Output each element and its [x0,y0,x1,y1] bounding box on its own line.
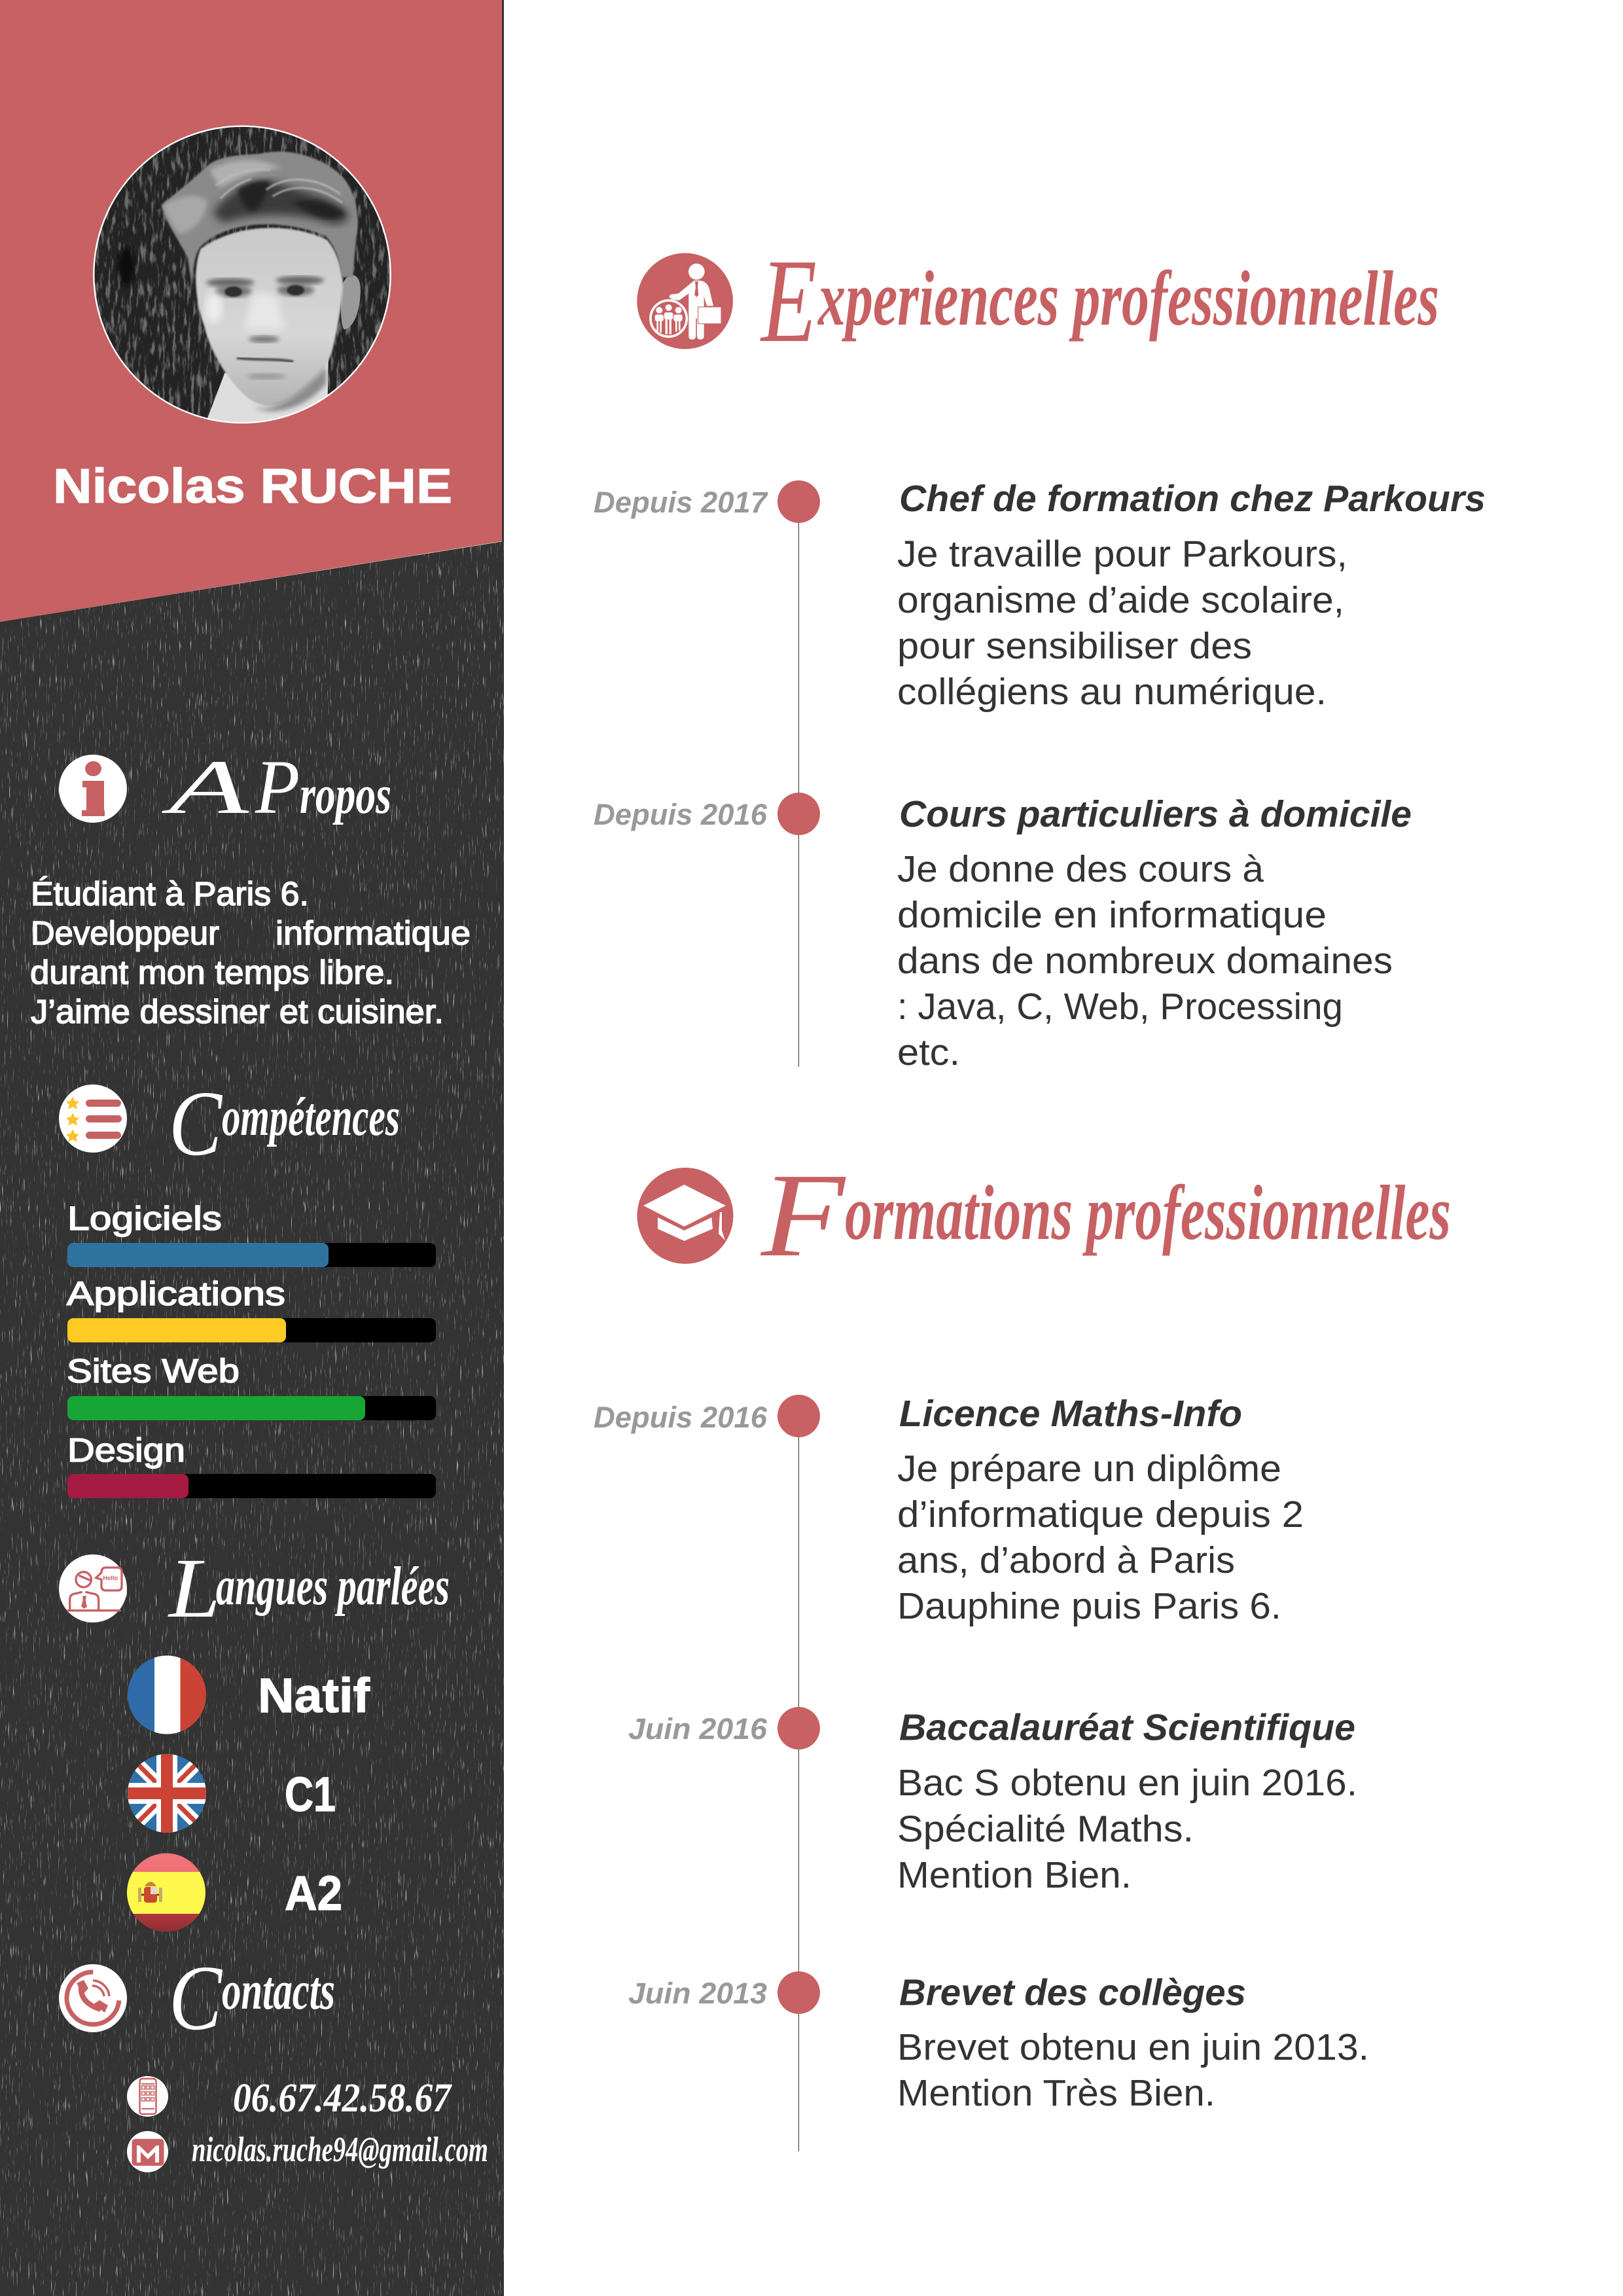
level: Natif: Natif [258,1668,370,1723]
entry: cours particuliers: : Java, C, Web, Processing [897,986,1343,1028]
skill: Logiciels: Logiciels [67,1200,222,1237]
icon: flag of France [128,1655,207,1734]
entry: Parkours: Je travaille pour Parkours, [897,533,1347,575]
level: A2: A2 [285,1866,342,1920]
icon: businessman [637,253,733,349]
icon: graduation cap [637,1168,733,1264]
text block: about [30,875,471,1030]
icon: mail [127,2131,168,2172]
entry: baccalaureat: Bac S obtenu en juin 2016. [897,1762,1357,1804]
timeline: formations [594,1393,1369,2151]
heading: Compétences: ompétences [222,1086,400,1147]
text block: about: Developpeur [31,914,219,952]
entry: licence [594,1393,1304,1627]
contact: email [127,2130,488,2172]
entry: cours particuliers: domicile en informatique [897,894,1327,936]
language: french [128,1655,370,1734]
text block: about: Étudiant à Paris 6. [31,875,309,912]
entry: Parkours: organisme d’aide scolaire, [897,579,1344,621]
icon: skills list [59,1085,127,1153]
section: competences heading [59,1071,400,1175]
entry: Parkours: Chef de formation chez Parkours [899,478,1486,520]
heading: Compétences: C [169,1071,223,1175]
entry: licence: Je prépare un diplôme [897,1448,1281,1490]
icon: flag of UK [128,1754,206,1833]
entry: cours particuliers [594,793,1412,1073]
skill: Design: Design [67,1431,185,1469]
timeline: experiences [594,478,1486,1073]
icon: info [59,755,127,823]
language: english [128,1754,336,1833]
skill: Applications [67,1275,436,1342]
skill: Sites Web: Sites Web [67,1352,240,1390]
name heading: Nicolas RUCHE [53,459,452,513]
heading: Formations professionnelles: F [760,1149,847,1282]
icon: mobile [127,2076,168,2117]
skill: Applications: Applications [67,1275,285,1312]
heading: A Propos: P [255,744,300,830]
heading: A Propos: ropos [300,764,391,825]
skill bars [67,1200,436,1498]
entry: Parkours: Depuis 2017 [594,486,768,519]
entry: brevet [628,1971,1369,2114]
heading: A Propos: A [161,744,250,830]
section heading: formations [637,1149,1451,1282]
heading: Langues parlées: angues parlées [216,1556,450,1617]
entry: Parkours [594,478,1486,713]
entry: brevet: Juin 2013 [628,1977,767,2010]
entry: Parkours: pour sensibiliser des [897,625,1252,667]
entry: cours particuliers: Depuis 2016 [594,798,768,831]
entry: brevet: Brevet des collèges [899,1971,1246,2013]
entry: licence: d’informatique depuis 2 [897,1494,1304,1535]
text block: about: J’aime dessiner et cuisiner. [31,993,444,1030]
heading: Contacts: ontacts [222,1960,335,2021]
skill: Sites Web [67,1352,436,1420]
entry: Parkours: collégiens au numérique. [897,671,1327,713]
entry: cours particuliers: etc. [897,1031,960,1073]
icon: hello speaker: Hello [103,1575,118,1581]
photo: portrait [92,124,393,427]
icon: flag of Spain [127,1853,205,1932]
text block: about: informatique [276,914,471,952]
entry: licence: Dauphine puis Paris 6. [897,1585,1281,1627]
entry: baccalaureat: Spécialité Maths. [897,1808,1194,1850]
text block: about: durant mon temps libre. [30,954,394,991]
heading: Contacts: C [169,1946,223,2049]
entry: baccalaureat [628,1707,1357,1896]
text: email address: nicolas.ruche94@gmail.com [192,2130,488,2169]
section: a propos heading [59,744,391,830]
level: C1: C1 [285,1767,336,1821]
entry: licence: Depuis 2016 [594,1401,768,1434]
icon: hello speaker [59,1554,127,1623]
entry: baccalaureat: Baccalauréat Scientifique [899,1707,1355,1749]
section: langues heading [59,1541,450,1636]
entry: cours particuliers: Cours particuliers à domicile [899,793,1412,835]
panel: dark sidebar background [0,537,504,2296]
entry: cours particuliers: dans de nombreux domaines [897,940,1393,982]
entry: baccalaureat: Mention Bien. [897,1854,1132,1896]
heading: Langues parlées: L [168,1541,221,1636]
icon: phone call [59,1964,127,2032]
skill: Design [67,1431,436,1498]
entry: baccalaureat: Juin 2016 [628,1712,768,1746]
text: phone number: 06.67.42.58.67 [233,2076,453,2121]
section: contacts heading [59,1946,335,2049]
entry: licence: Licence Maths-Info [899,1393,1242,1435]
entry: cours particuliers: Je donne des cours à [897,848,1264,890]
contact: phone [127,2076,453,2121]
entry: licence: ans, d’abord à Paris [897,1539,1235,1581]
section heading: experiences [637,234,1439,367]
panel: red sidebar header [0,0,504,622]
language: spanish [127,1853,342,1932]
skill: Logiciels [67,1200,436,1267]
entry: brevet: Mention Très Bien. [897,2072,1215,2114]
heading: Experiences professionnelles: E [760,234,817,367]
entry: brevet: Brevet obtenu en juin 2013. [897,2026,1369,2068]
